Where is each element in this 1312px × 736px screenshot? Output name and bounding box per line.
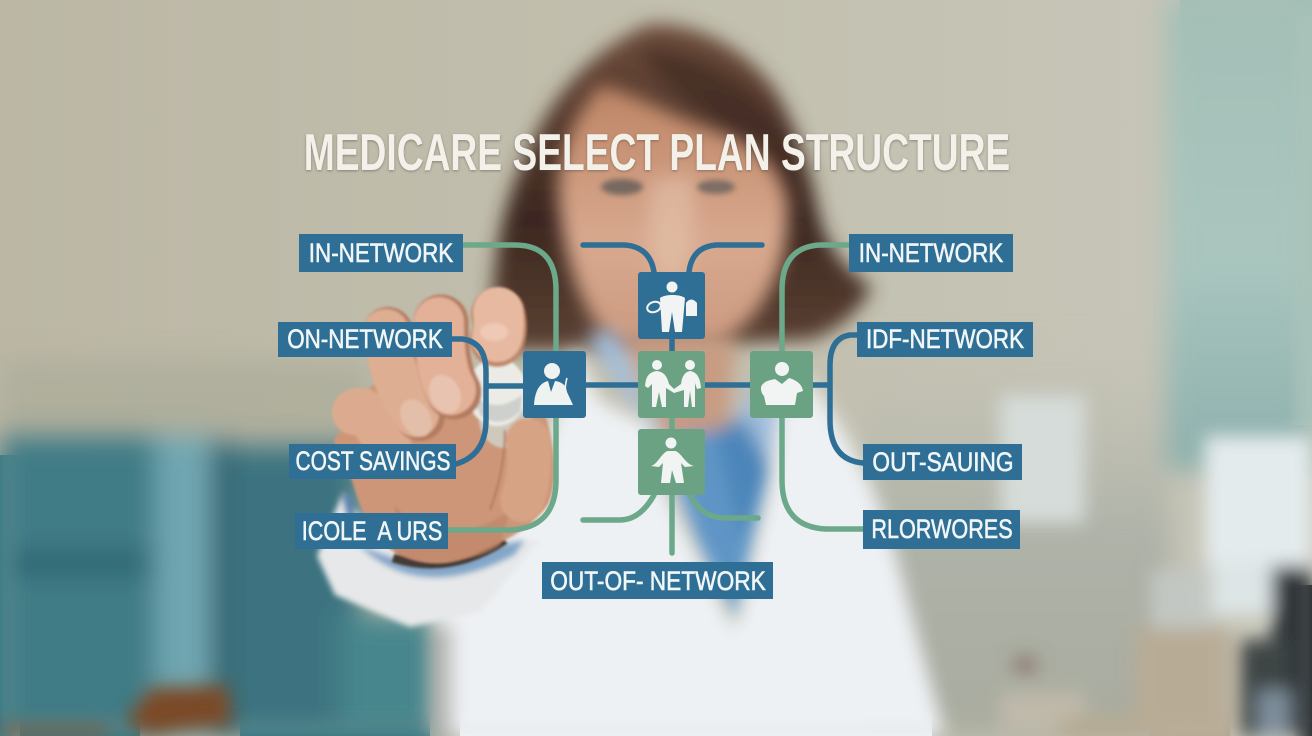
pinky [355, 411, 388, 445]
icon box: left doctor [523, 351, 586, 418]
sleeve [317, 492, 540, 627]
connectors: left green [448, 245, 556, 530]
label: idf-network: IDF-NETWORK [866, 324, 1024, 354]
woman: hair, face, coat and shirt [430, 24, 945, 736]
connectors: center vertical green [583, 418, 758, 553]
monitor and desk items [1205, 436, 1312, 566]
ring finger [388, 332, 420, 416]
connectors: left blue [452, 339, 523, 464]
connectors: top blue branches [583, 245, 762, 272]
label: on-network: ON-NETWORK [287, 324, 443, 354]
coat lower edge fade [460, 710, 932, 736]
picture frame [1000, 395, 1085, 523]
label: out-sauing: OUT-SAUING [872, 447, 1013, 477]
icon box: two people shaking hands [638, 351, 705, 418]
icon box: person with arms out [638, 429, 705, 495]
hand holding marker [317, 312, 555, 627]
label: rlorwores: RLORWORES [871, 514, 1012, 544]
connectors: center vertical blue [586, 339, 830, 385]
index finger [497, 314, 500, 340]
label: in-network right [849, 234, 1013, 272]
label: icole a urs: ICOLE A URS [301, 516, 442, 546]
label: in-network left [299, 234, 463, 272]
sofa [0, 436, 165, 736]
icon box: top doctor with bag [638, 272, 705, 339]
label: rlorwores [863, 510, 1020, 549]
icon box: right person [750, 351, 813, 418]
connector lines [448, 245, 863, 553]
middle finger [441, 322, 454, 392]
marker cap [479, 388, 531, 448]
title: MEDICARE SELECT PLAN STRUCTURE [304, 124, 1010, 182]
thumb [522, 440, 529, 500]
label: in-network left: IN-NETWORK [309, 238, 453, 268]
connectors: right green [782, 245, 863, 529]
palm [334, 370, 555, 563]
connectors: right blue [830, 335, 863, 463]
label: in-network right: IN-NETWORK [859, 238, 1003, 268]
label: out-of-network: OUT-OF- NETWORK [550, 566, 765, 596]
label: cost savings: COST SAVINGS [295, 446, 450, 476]
